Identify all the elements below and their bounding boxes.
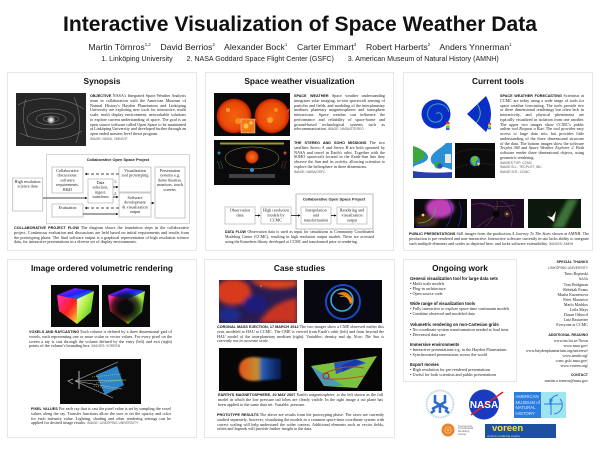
diagram: collaborative open space project: requirements, <box>56 182 79 188</box>
heading: space weather visualization: Space weather visualization <box>244 76 355 86</box>
image: spiral heliosphere disc <box>422 100 450 130</box>
voreen tagline: volume rendering engine <box>487 434 520 438</box>
credits: thanks, reading and contact: Dusan Odstrcil <box>564 312 588 317</box>
logo: linköping university <box>426 390 454 418</box>
list: export movies: Export movies <box>410 362 439 367</box>
credits: thanks, reading and contact: www.amnh.org/ <box>562 352 588 358</box>
diagram: data flow: CCMC <box>270 218 282 222</box>
diagram: collaborative open space project: Data <box>97 180 105 185</box>
diagram: collaborative open space project: Collaborative <box>56 168 79 173</box>
text: collaborative project flow: COLLABORATIVE PROJECT FLOW The diagram shows the foundation steps in the collaborative project. Continuous evaluation and discussions are held based on initial requirements and results from the prototyping phase. The final software output is a graphical representation of high resolution science data, for interactive presentations in a diverse set of display environments. <box>14 225 189 244</box>
image: earth magnetosphere full model <box>219 348 297 391</box>
ccmc wordmark: Community <box>458 424 472 428</box>
credits: thanks, reading and contact: Lutz Rastaetter <box>564 317 588 322</box>
diagram: data flow: output <box>347 218 358 222</box>
credits: thanks, reading and contact: Rebekah Evans <box>563 287 588 292</box>
text: objective: OBJECTIVE NASA's Integrated Space Weather Analysis team in collaboration with the American Museum of Natural History's Hayden Planetarium and Linköping University are exploring new tools for interactive, multi scale, multi display environment, networkable solutions to explore current understanding of space. The goal is an open source software called Open Space to be maintained at Linköping University and developed further through an open ended masters level thesis program. <box>90 93 186 136</box>
diagram: collaborative open space project: discussions: <box>57 173 78 178</box>
diagram: collaborative open space project: Evaluation <box>59 205 76 210</box>
diagram: collaborative open space project: selection, <box>93 185 108 191</box>
list: volumetric rendering <box>410 322 508 336</box>
diagram: data flow: Rendering and <box>340 208 365 212</box>
text: space weather forecasting: SPACE WEATHER FORECASTING Scientists at CCMC are today using a wide range of tools for space weather forecasting. The tools provide two or three dimensional renderings but often lack in interactivity, and physical phenomena are typically visualized in isolation from one another. The upper two images show CCMC's public online tool Request a Run. The tool provides easy access to large data sets, but provides little understanding of the three dimensional structure of the data. The bottom images show the software Tecplot 360 and Space Weather Explorer 2. Both software render three dimensional objects, using geometric rendering. <box>500 93 584 160</box>
image: coronal mass ejection view from earth <box>219 280 297 323</box>
text: public presentations: PUBLIC PRESENTATIONS Still images from the production A Journey To The Stars shown at AMNH. The production is pre-rendered and non-interactive. Interactive software currently in use lacks ability to integrate such multiple elements and scales as depicted here, and lacks software extensibility. IMAGES: AMNH <box>409 231 589 246</box>
credits: thanks, reading and contact: ADDITIONAL READING <box>548 332 588 336</box>
diagram: data flow: data <box>237 212 244 218</box>
text: data flow: DATA FLOW Observation data is used as input for simulations at Community Coordinated Modeling Center (CCMC), resulting in high resolution output models. These are accessed using the Kameleon library developed at CCMC and transformed prior to rendering. <box>225 229 374 244</box>
diagram: data flow <box>224 194 374 230</box>
image: journey to the stars still 3 <box>528 199 581 228</box>
diagram: collaborative open space project <box>12 154 190 224</box>
diagram: data flow: High resolution <box>263 208 289 212</box>
image: colour cube exit points <box>102 285 150 327</box>
panel: case studies <box>204 259 395 438</box>
authors: Martin Törnros1,2 David Berrios2 Alexander Bock1 Carter Emmart3 Robert Harberts2 Anders Ynnerman1 <box>88 42 512 52</box>
diagram: collaborative open space project: Presentation <box>160 168 180 173</box>
diagram: collaborative open space project: ingest, <box>95 189 106 195</box>
list: wide range of visualization tools: • Combine observed and modeled data <box>410 311 475 316</box>
image: journey to the stars still 1 <box>414 199 467 228</box>
list: immersive environments <box>410 342 506 357</box>
text: space weather forecasting: IMAGES TOP: CCMC <box>500 160 532 164</box>
logo text panel <box>514 392 540 418</box>
diagram: collaborative open space project: Collaborative Open Space Project <box>87 157 150 162</box>
image: space weather explorer earth <box>455 143 495 178</box>
panel: current tools <box>403 72 593 251</box>
logo: community coordinated modeling center <box>441 423 477 437</box>
diagram: collaborative open space project: 2. <box>114 191 117 196</box>
credits: thanks, reading and contact <box>526 260 588 383</box>
text: space weather: SPACE WEATHER Space weather understanding integrates solar imaging, in-situ spacecraft sensing of particles and fields, and modeling of the interplanetary medium, planetary magnetospheres and ionosphere interactions. Space weather can influence the performance and reliability of space-borne and ground-based technological systems such as telecommunication. IMAGE: NASA/STEREO <box>294 93 385 131</box>
text: prototype results: PROTOTYPE RESULTS The above are results from the prototyping phase. The cases are currently studied separately, however, visualizing the models in a common space-time coordinate system with correct scaling will help understand the wider context. Additional elements such as vector fields, orbits and legends will provide further insight to the data. <box>217 412 384 431</box>
heading: image ordered volumetric rendering: Image ordered volumetric rendering <box>31 263 173 273</box>
list: wide range of visualization tools <box>410 301 510 316</box>
diagram: data flow: Collaborative Open Space Project <box>303 196 366 202</box>
heading: synopsis: Synopsis <box>84 76 120 86</box>
credits: thanks, reading and contact: SPECIAL THANKS <box>557 260 588 264</box>
diagram: data flow: models by <box>267 212 285 218</box>
credits: thanks, reading and contact: martin.a.tornros@nasa.gov <box>545 378 588 382</box>
diagram: data flow: visualization <box>341 212 363 218</box>
list: general visualization tool: • Plug-in architecture <box>410 286 446 291</box>
diagram: data flow: and <box>313 212 320 218</box>
list: wide range of visualization tools: Wide range of visualization tools <box>410 301 475 306</box>
diagram: collaborative open space project: software <box>60 177 75 182</box>
list: volumetric rendering: • Decreased data size <box>410 332 446 336</box>
image: wedge plot <box>467 96 491 132</box>
list: export movies: • High resolution for pre-rendered presentations <box>410 367 490 372</box>
credits: thanks, reading and contact: www.haydenplanetarium.org/universe/ <box>526 348 588 352</box>
credits: thanks, reading and contact: www.voreen.org/ <box>560 362 588 368</box>
image: raycasting diagram <box>60 359 141 404</box>
diagram: collaborative open space project: High resolution <box>15 179 40 184</box>
diagram: data flow: Observation <box>230 208 250 212</box>
logo: voreen <box>485 424 556 438</box>
panel: space weather visualization <box>205 72 394 251</box>
text: space weather forecasting: IMAGE B.R.: CCMC <box>500 170 530 174</box>
ccmc wordmark: Center <box>458 432 466 436</box>
panel: ongoing work <box>403 259 517 382</box>
diagram: collaborative open space project: dome theatres, <box>158 177 182 183</box>
list: immersive environments: • Interactive presentations e.g. in the Hayden Planetarium <box>410 347 506 352</box>
heading: ongoing work: Ongoing work <box>432 263 488 273</box>
diagram: collaborative open space project: science data <box>17 184 38 189</box>
logo: nasa: NASA <box>470 400 498 411</box>
image: journey to the stars still 2 <box>471 199 524 228</box>
logo text panel: AMERICAN <box>516 394 539 399</box>
diagram: data flow: transformation <box>304 218 328 222</box>
diagram: collaborative open space project: screens. <box>163 187 177 192</box>
heading: current tools: Current tools <box>472 76 524 86</box>
image: colour cube entry points <box>51 285 99 327</box>
logo: nasa <box>469 390 504 420</box>
image: tecplot magnetosphere <box>413 143 452 178</box>
diagram: collaborative open space project: Visualization <box>124 168 146 173</box>
text: space weather forecasting: IMAGE B.L.: TECPLOT, INC. <box>500 165 542 169</box>
credits: thanks, reading and contact: www.itn.liu.se/?lown <box>554 338 588 342</box>
diagram: collaborative open space project: 1. <box>114 179 117 184</box>
credits: thanks, reading and contact: Marlo Maddox <box>564 302 588 307</box>
list: export movies: • Useful for both scientists and public presentations <box>410 372 496 377</box>
list: wide range of visualization tools: • Fully interactive to explore space-time continuum models <box>410 306 509 311</box>
text: voxels and raycasting: VOXELS AND RAYCASTING Each volume is defined by a three dimensional grid of voxels, each representing one or more scalar or vector values. For every pixel on the screen a ray is cast through the volume defined by the entry (left) and exit (right) points of the volume's bounding box. IMAGES: VOREEN <box>29 329 172 348</box>
logo text panel: NATURAL <box>516 405 536 410</box>
diagram: data flow: Interpolation <box>305 208 327 212</box>
list: export movies <box>410 362 496 377</box>
list: general visualization tool: • Open source code <box>410 291 443 296</box>
logo text panel: MUSEUM of <box>516 400 540 405</box>
list: general visualization tool: General visualization tool for large data sets <box>410 276 498 281</box>
credits: thanks, reading and contact: Timo Ropinski <box>564 271 588 276</box>
credits: thanks, reading and contact: CONTACT <box>571 372 588 376</box>
list: immersive environments: Immersive environments <box>410 342 459 347</box>
image: stereo and soho orbit diagram <box>214 140 290 185</box>
image: earth magnetosphere cut plane <box>304 348 382 391</box>
diagram: collaborative open space project: development <box>124 200 147 205</box>
text: earth's magnetosphere: EARTH'S MAGNETOSPHERE, 20 MAY 2007 Earth's magnetosphere, to the left shown as the full model in which the low pressure tail lobes are clearly visible. In the right image a cut plane has been applied to the same data set. Variable: pressure. <box>218 392 383 406</box>
credits: thanks, reading and contact: Masha Kuznetsova <box>557 292 588 297</box>
credits: thanks, reading and contact: www.nasa.gov/ <box>563 342 588 348</box>
diagram: collaborative open space project: output <box>130 209 141 214</box>
ccmc emblem <box>441 423 455 437</box>
list: volumetric rendering: • No coordinate system transformation needed at load time <box>410 326 508 332</box>
ccmc wordmark <box>458 424 473 436</box>
text: stereo and soho missions: IMAGE: NASA/GSFC <box>294 170 326 174</box>
list: general visualization tool <box>410 276 498 296</box>
image: solar system orbits <box>16 93 86 146</box>
panel: image ordered volumetric rendering <box>7 259 197 438</box>
diagram: collaborative open space project: systems e.g. <box>160 173 180 178</box>
diagram: collaborative open space project: R&D <box>63 187 72 192</box>
text: stereo and soho missions: THE STEREO AND SOHO MISSIONS The two satellites Stereo A and Stereo B are both operated by NASA and travel in Earth's orbit. Together with the SOHO spacecraft located in the Earth-Sun line they observe the Sun and its activity, allowing scientists to explore the heliosphere in three dimensions. <box>294 140 385 169</box>
credits: thanks, reading and contact: Leila Mays <box>570 307 588 312</box>
credits: thanks, reading and contact: Everyone at CCMC <box>556 322 588 327</box>
credits: thanks, reading and contact: Peter Macneice <box>563 297 588 302</box>
logo: american museum of natural history <box>514 392 566 418</box>
credits: thanks, reading and contact: NASA <box>579 277 588 281</box>
image: coronal mass ejection view from above <box>304 280 382 323</box>
diagram: collaborative open space project: tool prototyping <box>122 173 148 178</box>
list: general visualization tool: • Multi scale models <box>410 281 444 286</box>
diagram: collaborative open space project: transform <box>92 194 109 199</box>
text: coronal mass ejection: CORONAL MASS EJECTION, 17 MARCH 2012 The two images show a CME observed earlier this year, modeled to HAU at CCMC. The CME is viewed from Earth's orbit (left) and from beyond the HAU model of the interplanetary medium (right). Variables: density and dp. Note: The Sun is currently not in accurate scale. <box>217 324 384 343</box>
credits: thanks, reading and contact: Tom Bridgman <box>564 282 588 286</box>
text: objective: IMAGE: NMSU, OMNIVIT <box>90 137 128 141</box>
ccmc wordmark: Modeling <box>458 429 469 433</box>
image: two suns <box>214 93 290 136</box>
text: pixel values: PIXEL VALUES For each ray that is cast the pixel value is set by sampling the voxel values along the ray. Transfer functions allow the user to set the opacity and color for each intensity value. Lighting, shading and other rendering settings can be applied for desired image results. IMAGE: LINKÖPING UNIVERSITY <box>31 406 171 425</box>
list: volumetric rendering: Volumetric rendering on non-Cartesian grids <box>410 322 499 326</box>
list: immersive environments: • Synchronized presentations across the world <box>410 352 487 357</box>
credits: thanks, reading and contact: LINKÖPING UNIVERSITY <box>548 266 588 270</box>
ccmc wordmark: Coordinated <box>458 426 473 430</box>
diagram: collaborative open space project: monitors, touch <box>157 182 184 188</box>
logo text panel: HISTORY <box>516 411 535 416</box>
heading: case studies: Case studies <box>274 263 325 273</box>
diagram: collaborative open space project: & visualization <box>122 204 148 209</box>
diagram: collaborative open space project: Software <box>128 195 143 200</box>
affiliations: 1. Linköping University 2. NASA Goddard Space Flight Center (GSFC) 3. American Museum of Natural History (AMNH) <box>101 55 499 63</box>
credits: thanks, reading and contact: ccmc.gsfc.nasa.gov/ <box>556 358 588 362</box>
title: Interactive Visualization of Space Weather Data <box>63 13 537 36</box>
logo emblem <box>542 393 566 417</box>
panel: synopsis <box>7 72 197 251</box>
